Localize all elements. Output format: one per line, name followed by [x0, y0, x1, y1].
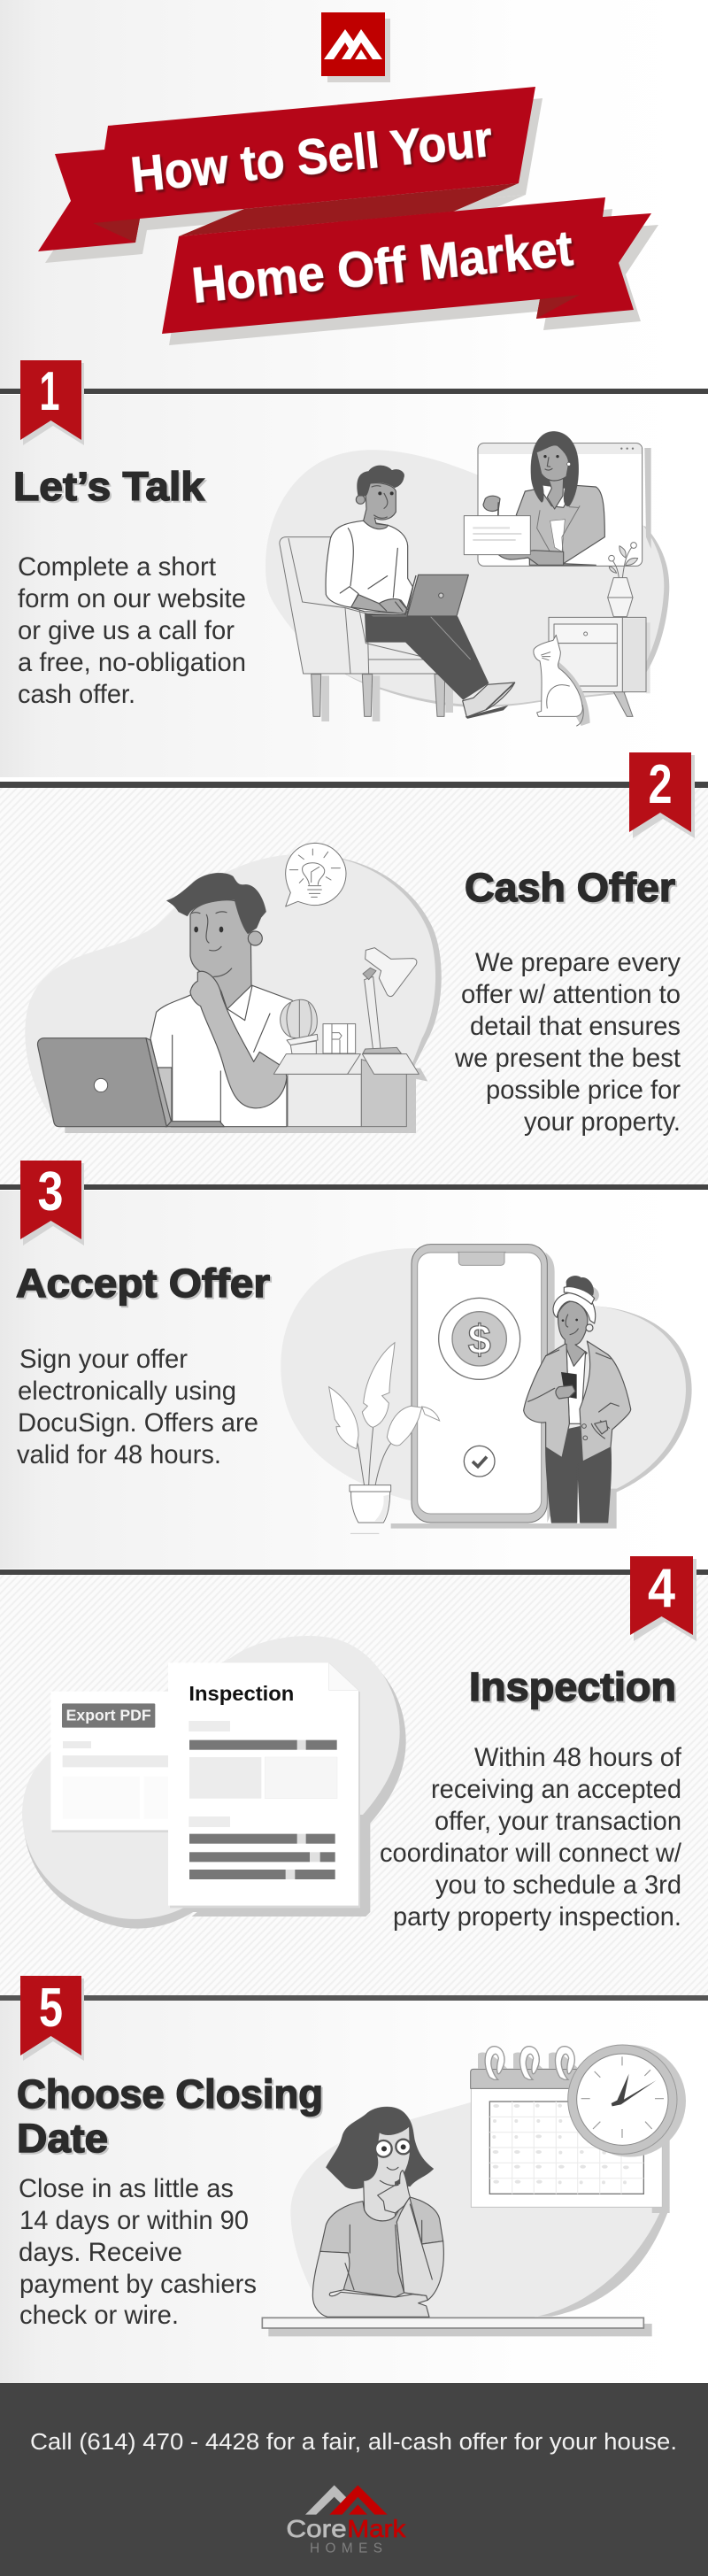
body text: Sign your offer — [19, 1345, 188, 1374]
export button: Export PDF — [66, 1706, 151, 1724]
illustration: inspection documents — [22, 1636, 406, 1929]
body text: receiving an accepted — [431, 1775, 681, 1804]
clock — [568, 2045, 686, 2157]
blob — [22, 1636, 406, 1929]
footer logo: Core — [286, 2515, 347, 2542]
table — [262, 2318, 652, 2336]
back document — [50, 1692, 170, 1832]
illustration: man on armchair video call — [266, 431, 669, 726]
body text: 14 days or within 90 — [19, 2206, 249, 2235]
panel: step 3 — [0, 1161, 708, 2576]
body text: or give us a call for — [18, 616, 235, 645]
body text: party property inspection. — [393, 1902, 681, 1932]
ribbon 5 — [20, 1976, 84, 2061]
shirt — [150, 985, 312, 1127]
floor — [350, 1489, 617, 1533]
phone — [412, 1245, 555, 1523]
title banner — [38, 87, 658, 345]
body text: we present the best — [454, 1044, 681, 1073]
woman with phone — [524, 1276, 631, 1523]
ribbon 3 — [20, 1161, 84, 1246]
video window — [478, 443, 651, 566]
body text: detail that ensures — [470, 1012, 681, 1041]
lamp — [363, 948, 417, 1053]
ribbon 4: 4 — [648, 1558, 675, 1619]
body text — [18, 552, 246, 709]
woman thinking — [312, 2107, 443, 2317]
body text: We prepare every — [475, 948, 681, 977]
banner shadow — [45, 98, 658, 345]
ribbon 1: 1 — [39, 361, 60, 422]
blob — [25, 854, 442, 1133]
body text: your property. — [524, 1107, 681, 1137]
banner fold — [179, 183, 519, 236]
footer logo: HOMES — [310, 2541, 382, 2556]
cat — [534, 635, 590, 726]
armchair — [280, 537, 453, 721]
heading: Let’s Talk — [13, 464, 205, 509]
body text: Within 48 hours of — [474, 1743, 682, 1772]
heading: Cash Offer — [465, 865, 675, 910]
body text: cash offer. — [18, 680, 135, 709]
heading: Choose Closing — [17, 2071, 323, 2117]
body text — [19, 2174, 257, 2330]
woman on screen — [464, 431, 604, 565]
calendar — [471, 2047, 670, 2213]
front document — [168, 1662, 360, 1908]
body text: electronically using — [18, 1377, 236, 1406]
illustration: man thinking at laptop — [25, 843, 442, 1133]
ribbon 2: 2 — [648, 754, 673, 815]
arm and hand — [190, 971, 287, 1108]
footer logo: Mark — [347, 2515, 406, 2542]
heading: Accept Offer — [16, 1261, 270, 1306]
body text: Complete a short — [18, 552, 216, 582]
side cabinet — [549, 617, 650, 716]
body text: possible price for — [486, 1076, 681, 1105]
banner top ribbon — [38, 87, 535, 251]
laptop — [37, 1038, 224, 1127]
blob — [281, 1248, 692, 1500]
plant — [329, 1343, 440, 1523]
illustration: woman beside phone — [281, 1245, 692, 1533]
footer — [0, 2383, 708, 2576]
footer logo — [286, 2485, 406, 2556]
body text: offer w/ attention to — [461, 980, 681, 1009]
body text: payment by cashiers — [19, 2270, 257, 2299]
body text: coordinator will connect w/ — [380, 1839, 682, 1868]
lightbulb speech bubble — [286, 843, 346, 906]
panel: step 2 — [0, 752, 708, 2576]
panel: step 4 — [22, 1556, 696, 1932]
ribbon 1 — [20, 360, 84, 445]
body text: offer, your transaction — [435, 1807, 681, 1836]
phone: $ — [468, 1316, 491, 1362]
body text: days. Receive — [19, 2238, 182, 2267]
open box — [273, 1054, 419, 1127]
heading: Inspection — [469, 1664, 676, 1709]
title line 2: Home Off Market — [189, 220, 575, 314]
man head — [166, 873, 266, 1009]
illustration: woman with calendar and clock — [262, 2045, 686, 2336]
vase with plant — [608, 543, 638, 617]
body text: check or wire. — [19, 2301, 179, 2330]
body text: Close in as little as — [19, 2174, 234, 2203]
body text: valid for 48 hours. — [17, 1440, 221, 1469]
ribbon 5: 5 — [39, 1978, 63, 2039]
body text — [380, 1743, 682, 1932]
cactus and frame — [281, 999, 356, 1054]
body text — [17, 1345, 258, 1469]
document title: Inspection — [189, 1682, 294, 1705]
laptop — [371, 575, 468, 617]
logo badge — [321, 12, 390, 82]
body text: you to schedule a 3rd — [435, 1870, 681, 1900]
panel: step 5 — [17, 1976, 686, 2336]
export button — [62, 1703, 155, 1728]
ribbon 2 — [629, 752, 695, 838]
man — [326, 466, 515, 718]
call to action: Call (614) 470 - 4428 for a fair, all-cash offer for your house. — [30, 2430, 677, 2455]
body text — [454, 948, 681, 1137]
ribbon 3: 3 — [37, 1161, 64, 1222]
ribbon 4 — [630, 1556, 696, 1641]
body text: DocuSign. Offers are — [18, 1408, 258, 1438]
blob — [266, 450, 669, 707]
heading: Date — [17, 2116, 108, 2161]
heading — [17, 2071, 323, 2161]
blob — [290, 2102, 670, 2317]
title line 1: How to Sell Your — [128, 111, 495, 204]
banner bottom ribbon — [162, 197, 651, 334]
body text: a free, no-obligation — [18, 648, 246, 677]
body text: form on our website — [18, 584, 246, 613]
